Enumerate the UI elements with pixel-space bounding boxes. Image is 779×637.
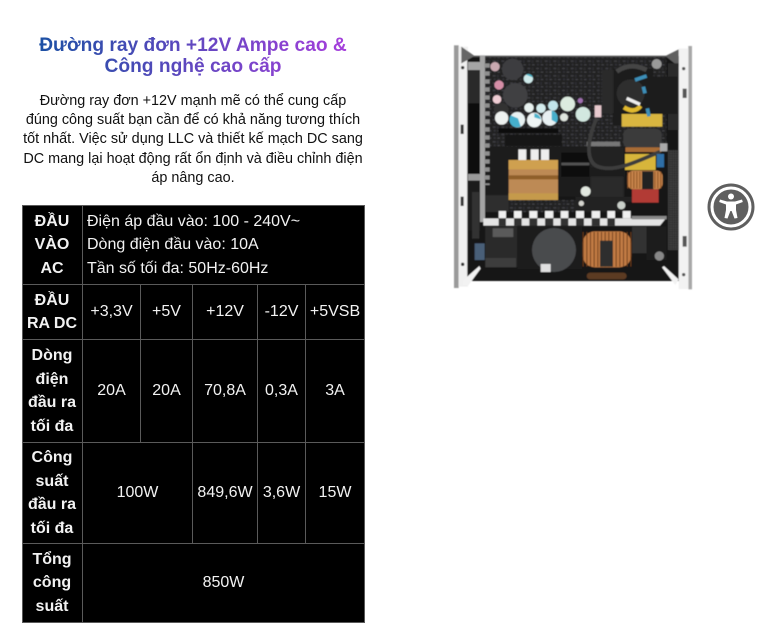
row: max output current: điện xyxy=(36,370,68,388)
row: total power xyxy=(32,551,72,615)
row: DC output: RA DC xyxy=(27,315,77,332)
capacitors xyxy=(490,59,625,209)
row: max output power: tối đa xyxy=(31,520,73,536)
large capacitor xyxy=(517,226,582,272)
current +5VSB: 3A xyxy=(325,382,345,399)
power +5VSB: 15W xyxy=(319,484,351,501)
description text: tốt nhất. Việc sử dụng LLC và thiết kế mạch DC sang xyxy=(23,131,363,147)
row: DC output xyxy=(27,291,77,332)
title: Công nghệ cao cấp xyxy=(104,56,281,77)
lower left parts xyxy=(472,192,517,267)
row: max output power xyxy=(28,449,76,536)
voltage +3,3V: +3,3V xyxy=(90,303,133,320)
description text: Đường ray đơn +12V mạnh mẽ có thể cung cấp xyxy=(40,93,346,109)
description text: DC mang lại hoạt động rất ổn định và điều chỉnh điện xyxy=(23,151,363,167)
row: total power: suất xyxy=(36,598,68,615)
chassis xyxy=(454,45,692,289)
row: AC input: VÀO xyxy=(35,236,69,253)
row: max output power: Công xyxy=(32,449,72,466)
voltage +5V: +5V xyxy=(152,303,181,320)
row: max output current: tối đa xyxy=(31,418,73,434)
current +3,3V: 20A xyxy=(97,382,126,399)
voltage +5VSB: +5VSB xyxy=(310,303,360,320)
copper toroid coil xyxy=(583,231,631,279)
title xyxy=(22,35,364,77)
description text: áp nâng cao. xyxy=(151,170,235,186)
power -12V: 3,6W xyxy=(263,484,300,501)
AC input values: Tần số tối đa: 50Hz-60Hz xyxy=(87,260,268,277)
row: AC input: AC xyxy=(40,260,64,277)
icon: accessibility button xyxy=(708,184,754,230)
row: AC input xyxy=(34,212,69,277)
AC input values: Dòng điện đầu vào: 10A xyxy=(87,236,259,253)
row: total power: Tổng xyxy=(32,551,72,568)
row: total power: công xyxy=(33,574,71,591)
yellow transformer xyxy=(622,114,662,170)
specification table xyxy=(22,205,365,623)
power +3,3V and +5V: 100W xyxy=(117,484,158,501)
heatsink left xyxy=(480,55,487,222)
current +12V: 70,8A xyxy=(204,382,246,399)
row: AC input: ĐẦU xyxy=(35,213,69,230)
black cable xyxy=(589,118,667,168)
lower right parts xyxy=(632,227,667,261)
AC input values xyxy=(87,213,300,277)
row: max output current: Dòng xyxy=(32,347,72,364)
gold transformer xyxy=(509,149,558,200)
row: DC output: ĐẦU xyxy=(35,292,69,308)
power supply photo xyxy=(454,44,692,290)
current +5V: 20A xyxy=(152,382,181,399)
row: max output power: suất xyxy=(36,472,68,490)
title: Đường ray đơn +12V Ampe cao & xyxy=(39,35,347,56)
description text: đúng công suất bạn cần để có khả năng tương thích xyxy=(26,112,360,128)
input socket and coil xyxy=(617,59,677,116)
row: max output power: đầu ra xyxy=(28,496,76,513)
description text xyxy=(23,93,363,186)
voltage +12V: +12V xyxy=(206,303,244,320)
total power value: 850W xyxy=(203,574,244,591)
power +12V: 849,6W xyxy=(197,484,253,501)
circuit board xyxy=(485,57,667,215)
copper filter coil and red capacitor xyxy=(627,171,663,203)
row: max output current: đầu ra xyxy=(28,394,76,411)
current -12V: 0,3A xyxy=(265,382,298,399)
checkered heatsink xyxy=(483,211,667,226)
AC input values: Điện áp đầu vào: 100 - 240V~ xyxy=(87,213,300,230)
voltage -12V: -12V xyxy=(265,303,298,320)
row: max output current xyxy=(28,347,76,434)
